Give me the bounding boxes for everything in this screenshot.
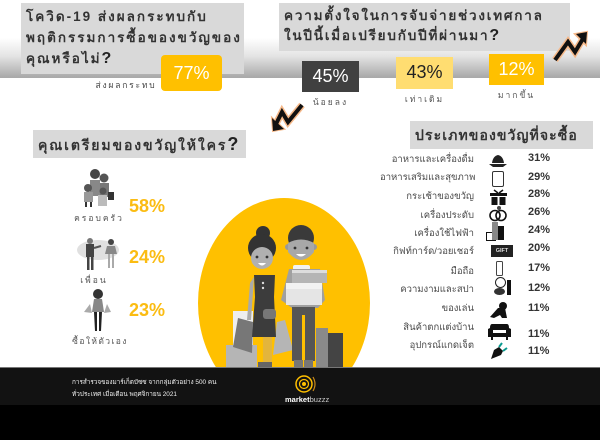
category: beauty and spa row: ความงามและสปา — [400, 284, 474, 295]
category: toys row: 11% — [528, 302, 549, 314]
stat: 12 percent more — [489, 54, 544, 85]
category: gift cards row: GIFT — [496, 248, 508, 254]
category: mobile row: 17% — [528, 262, 550, 274]
label: self: ซื้อให้ตัวเอง — [72, 336, 128, 346]
heading: covid impact question: คุณหรือไม่? — [26, 50, 113, 67]
top gradient band — [0, 0, 600, 78]
label: affected: ส่งผลกระทบ — [95, 80, 156, 90]
category: gift cards row — [393, 242, 550, 257]
category: electronics row — [414, 222, 550, 241]
category: gift cards row: กิฟท์การ์ด/วอยเชอร์ — [393, 246, 474, 257]
icon: friends — [77, 238, 119, 270]
bottom black strip — [0, 405, 600, 440]
category: jewellery row: 26% — [528, 206, 550, 218]
footer: survey note — [72, 378, 217, 398]
stat: 43 percent same: 43% — [406, 62, 443, 82]
stat: 12 percent more: 12% — [498, 59, 535, 79]
stat: friends 24 percent: 24% — [129, 247, 165, 267]
heading: spending intention question — [279, 3, 570, 51]
stat: 77 percent affected — [161, 55, 222, 91]
stat: 45 percent less — [302, 61, 359, 92]
heading: who are gifts for: คุณเตรียมของขวัญให้ใคร? — [38, 134, 240, 154]
category: gadgets row: อุปกรณ์แกดเจ็ต — [410, 340, 474, 351]
category: supplements row: อาหารเสริมและสุขภาพ — [380, 172, 475, 183]
category: toys row — [442, 302, 550, 318]
heading: gift types: ประเภทของขวัญที่จะซื้อ — [415, 127, 578, 143]
heading: covid impact question — [21, 3, 244, 74]
arrow: down — [270, 102, 305, 132]
footer bar — [0, 367, 600, 405]
category: supplements row — [380, 171, 550, 187]
category: electronics row: 24% — [528, 224, 550, 236]
category: home decor row: 11% — [528, 328, 549, 340]
arrow: up — [552, 30, 588, 62]
category: gadgets row: 11% — [528, 345, 549, 357]
category: gift cards row: 20% — [528, 242, 550, 254]
stat: 77 percent affected: 77% — [173, 63, 210, 83]
logo: marketbuzzz — [285, 375, 329, 404]
category: supplements row: 29% — [528, 171, 550, 183]
category: food and drink row — [392, 152, 550, 167]
category: jewellery row — [421, 206, 550, 222]
heading: spending intention question: ในปีนี้เมื่อเปรียบกับปีที่ผ่านมา? — [284, 27, 501, 44]
heading: covid impact question: พฤติกรรมการซื้อของขวัญของ — [26, 30, 242, 45]
category: beauty and spa row: 12% — [528, 282, 550, 294]
category: gift basket row: 28% — [528, 188, 550, 200]
heading: covid impact question: โควิด-19 ส่งผลกระทบกับ — [26, 9, 208, 24]
illustration: couple with gifts on yellow circle — [198, 198, 370, 367]
category: mobile row — [451, 261, 550, 277]
stat: family 58 percent: 58% — [129, 196, 165, 216]
category: gift basket row: กระเช้าของขวัญ — [406, 191, 474, 202]
icon: self — [84, 289, 111, 331]
stat: 45 percent less: 45% — [312, 66, 349, 86]
footer: survey note: การสำรวจของมาร์เก็ตบัซซ จากกลุ่มตัวอย่าง 500 คน — [72, 379, 217, 386]
stat: 43 percent same — [396, 57, 453, 89]
heading: who are gifts for — [33, 130, 246, 158]
label: more: มากขึ้น — [498, 90, 535, 100]
label: same: เท่าเดิม — [405, 94, 444, 104]
category: jewellery row: เครื่องประดับ — [421, 210, 474, 221]
logo: marketbuzzz: marketbuzzz — [285, 395, 329, 404]
category: mobile row: มือถือ — [451, 266, 474, 277]
category: electronics row: เครื่องใช้ไฟฟ้า — [414, 228, 474, 239]
heading: spending intention question: ความตั้งใจในการจับจ่ายช่วงเทศกาล — [284, 8, 544, 23]
label: family: ครอบครัว — [74, 213, 124, 223]
category: food and drink row: 31% — [528, 152, 550, 164]
icon: family — [84, 169, 114, 207]
label: friends: เพื่อน — [80, 275, 108, 285]
category: gift basket row — [406, 188, 550, 205]
category: gadgets row — [410, 339, 550, 359]
category: home decor row: สินค้าตกแต่งบ้าน — [403, 322, 474, 333]
category: food and drink row: อาหารและเครื่องดื่ม — [392, 154, 474, 165]
footer: survey note: ทั่วประเทศ เมื่อเดือน พฤศจิกายน 2021 — [72, 390, 177, 398]
category: home decor row — [403, 322, 550, 340]
stat: self 23 percent: 23% — [129, 300, 165, 320]
heading: gift types — [410, 121, 593, 149]
category: beauty and spa row — [400, 277, 550, 295]
label: less: น้อยลง — [313, 97, 348, 107]
category: toys row: ของเล่น — [442, 303, 474, 314]
